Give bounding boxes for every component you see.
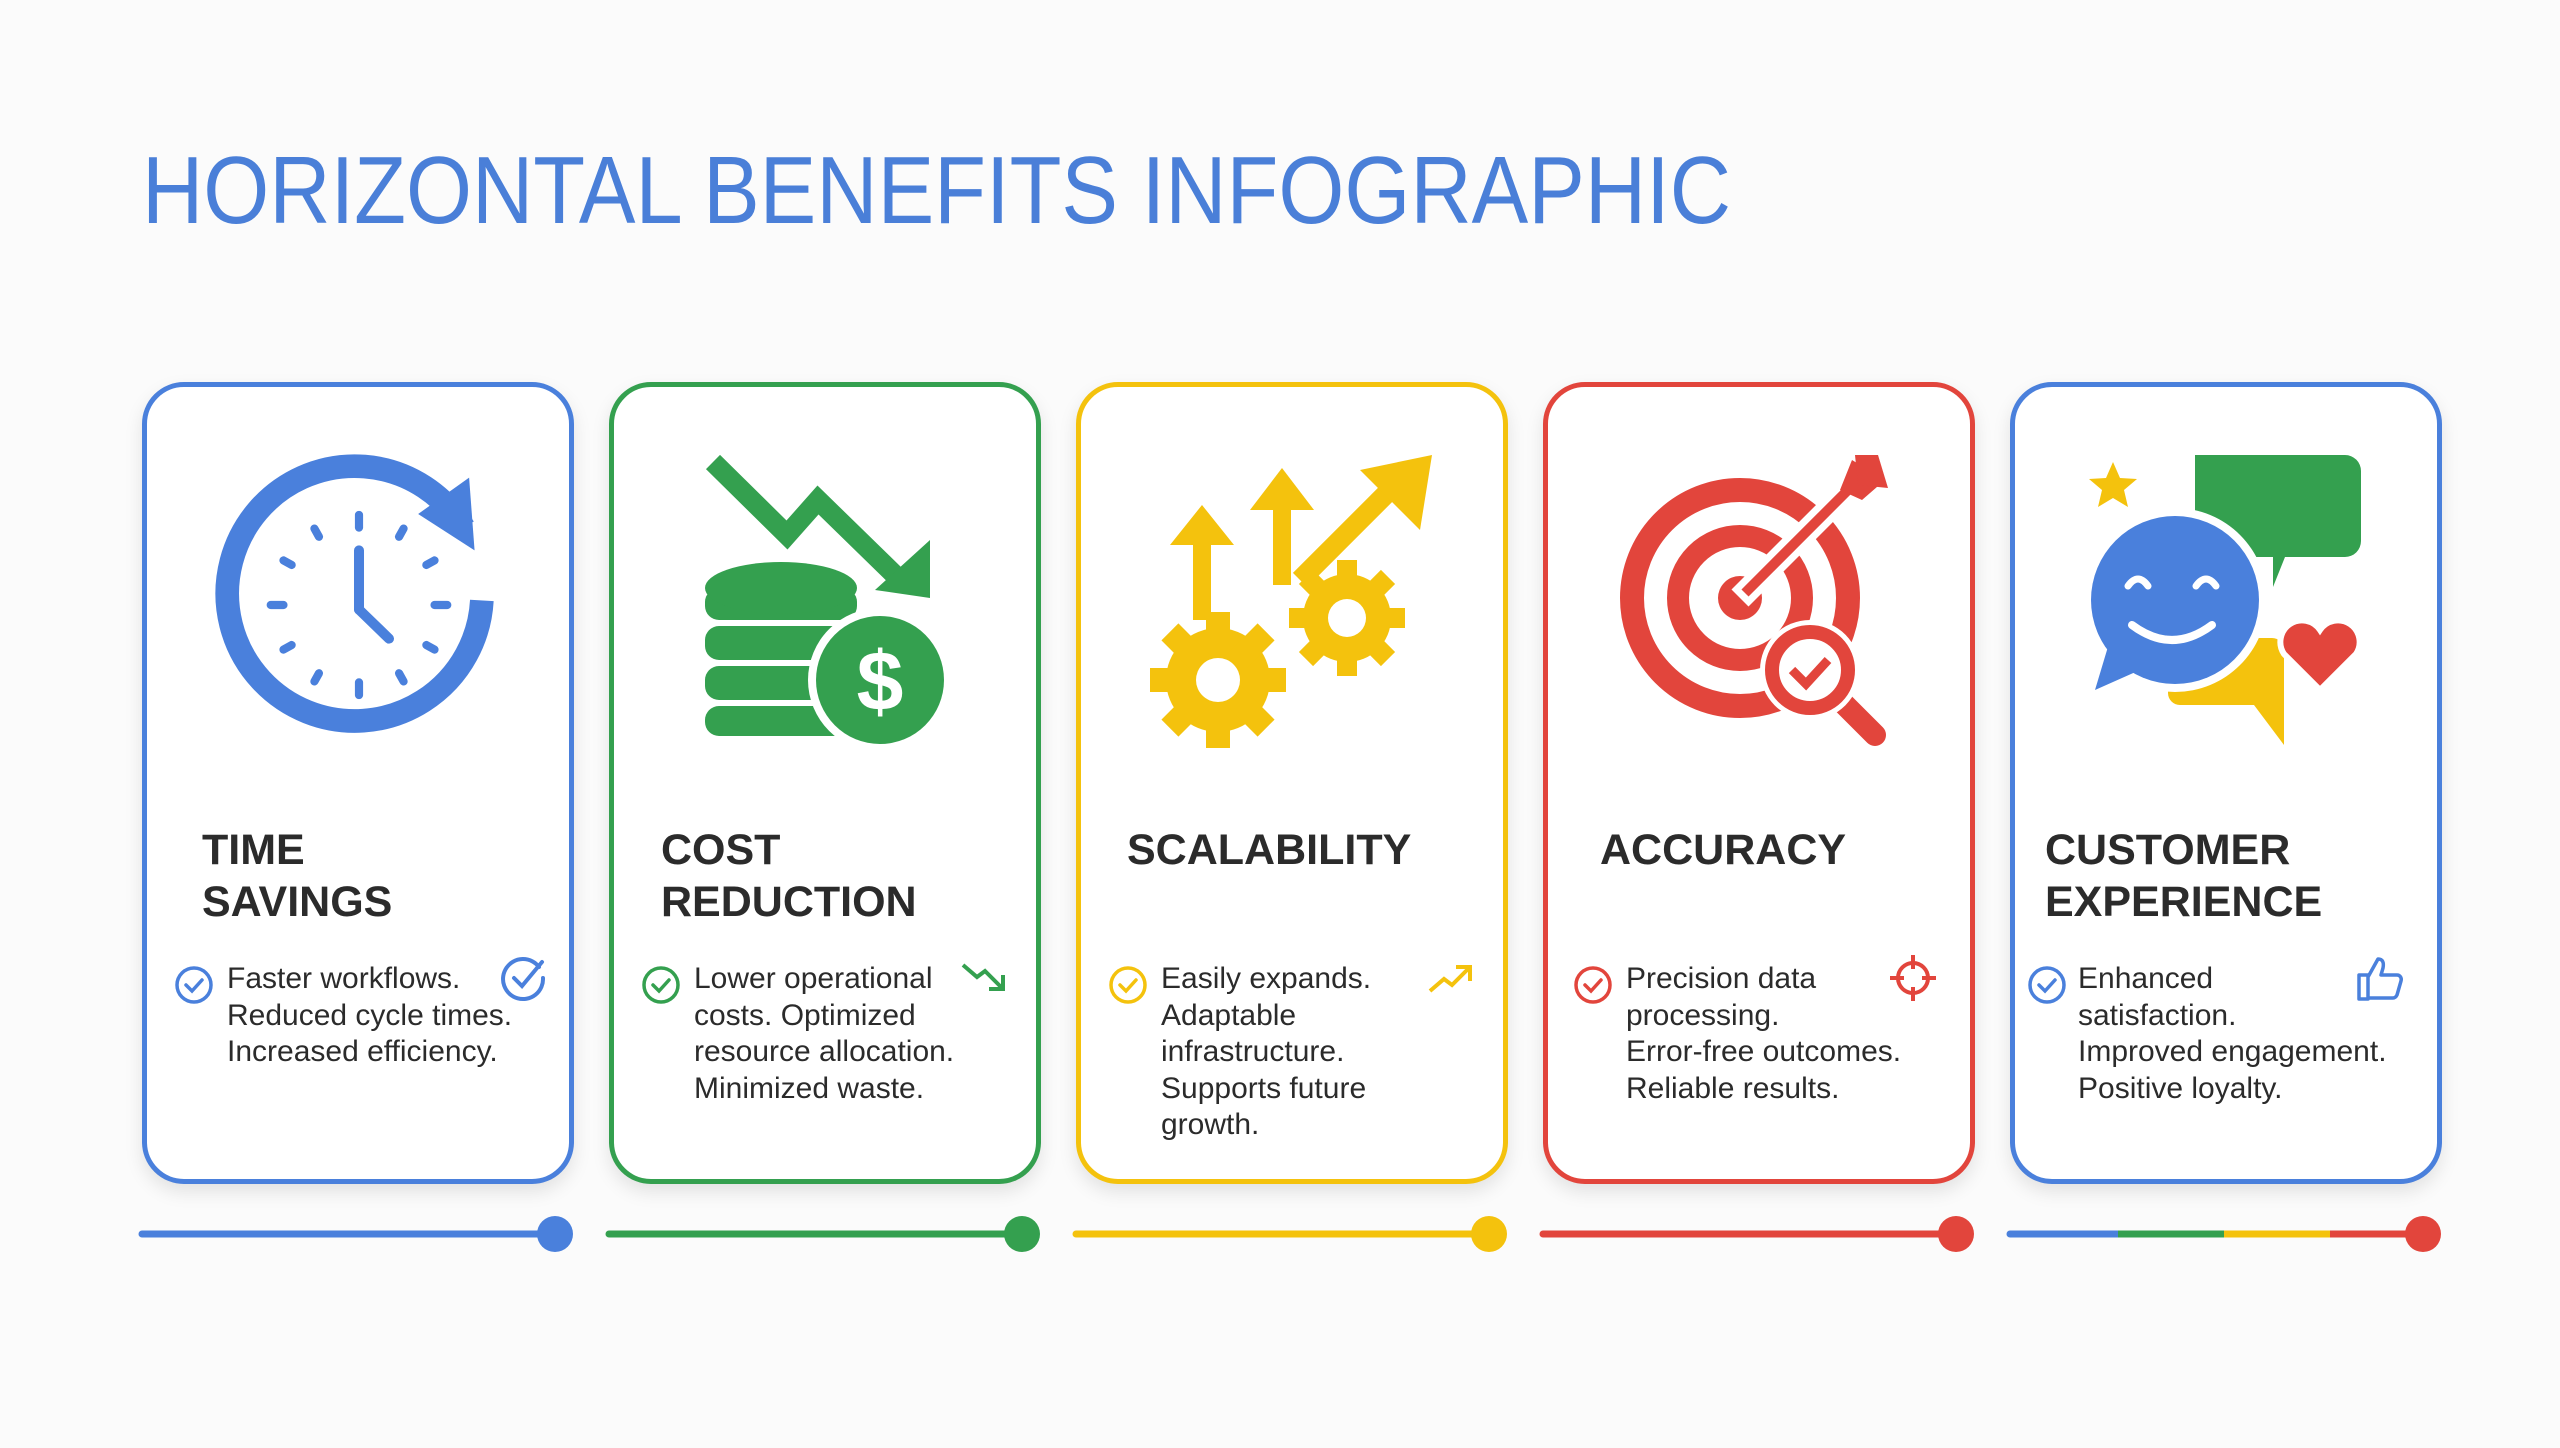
heading: customer experience: CUSTOMER xyxy=(2045,826,2290,874)
heading: cost reduction: REDUCTION xyxy=(661,878,917,926)
icon: chat bubbles xyxy=(2083,455,2361,745)
heading: customer experience: EXPERIENCE xyxy=(2045,878,2322,926)
panel: customer experience xyxy=(2010,382,2442,1184)
heading: time savings: TIME xyxy=(202,826,305,874)
icon: check xyxy=(1109,966,1147,1004)
icon: target with magnifier xyxy=(1632,455,1888,735)
heading: time savings xyxy=(202,826,392,926)
text: accuracy: Precision data xyxy=(1626,962,1816,995)
icon: coins with down arrow xyxy=(705,462,952,752)
text: scalability: growth. xyxy=(1161,1108,1259,1141)
panel: accuracy xyxy=(1543,382,1975,1184)
text: time savings: Increased efficiency. xyxy=(227,1035,498,1068)
icon: check xyxy=(175,966,213,1004)
text: scalability: Adaptable xyxy=(1161,998,1296,1032)
progress line: scalability xyxy=(1076,1216,1507,1252)
text: scalability: infrastructure. xyxy=(1161,1035,1344,1068)
text: cost reduction: resource allocation. xyxy=(694,1035,954,1068)
icon: clock xyxy=(227,466,482,721)
text: scalability xyxy=(1161,962,1371,1141)
panel: time savings xyxy=(142,382,574,1184)
text: time savings xyxy=(227,962,512,1068)
icon: coins with down arrow: $ xyxy=(857,634,903,728)
text: scalability: Easily expands. xyxy=(1161,962,1371,995)
text: customer experience xyxy=(2078,962,2387,1104)
icon: trend down xyxy=(962,964,1005,991)
progress line: time xyxy=(142,1216,573,1252)
text: customer experience: Improved engagement. xyxy=(2078,1035,2387,1068)
heading: cost reduction: COST xyxy=(661,826,780,874)
title: HORIZONTAL BENEFITS INFOGRAPHIC xyxy=(142,137,1731,244)
text: time savings: Reduced cycle times. xyxy=(227,998,512,1032)
text: cost reduction: Lower operational xyxy=(694,962,932,995)
text: accuracy xyxy=(1626,962,1901,1104)
heading: time savings: SAVINGS xyxy=(202,878,392,926)
icon: check xyxy=(642,966,680,1004)
heading: customer experience xyxy=(2045,826,2322,926)
progress line: cost xyxy=(609,1216,1040,1252)
progress line: accuracy xyxy=(1543,1216,1974,1252)
icon: check small xyxy=(501,957,545,1001)
text: customer experience: Positive loyalty. xyxy=(2078,1072,2283,1104)
panel: scalability xyxy=(1076,382,1508,1184)
text: time savings: Faster workflows. xyxy=(227,962,460,995)
icon: gears with up arrows xyxy=(1150,455,1432,748)
icon: crosshair xyxy=(1890,955,1936,1001)
text: accuracy: Reliable results. xyxy=(1626,1072,1839,1104)
text: customer experience: Enhanced xyxy=(2078,962,2213,995)
text: accuracy: processing. xyxy=(1626,998,1779,1032)
text: accuracy: Error-free outcomes. xyxy=(1626,1035,1901,1068)
heading: cost reduction xyxy=(661,826,917,926)
icon: check xyxy=(1574,966,1612,1004)
text: scalability: Supports future xyxy=(1161,1072,1366,1104)
icon: thumbs up xyxy=(2357,957,2403,1001)
heading: accuracy: ACCURACY xyxy=(1600,826,1846,874)
progress line: customer xyxy=(2010,1216,2441,1252)
icon: check xyxy=(2028,966,2066,1004)
text: cost reduction xyxy=(694,962,954,1104)
text: cost reduction: costs. Optimized xyxy=(694,998,916,1032)
text: cost reduction: Minimized waste. xyxy=(694,1072,924,1104)
panel: cost reduction xyxy=(609,382,1041,1184)
icon: trend up xyxy=(1428,965,1472,992)
heading: scalability: SCALABILITY xyxy=(1127,826,1411,874)
text: customer experience: satisfaction. xyxy=(2078,998,2236,1032)
